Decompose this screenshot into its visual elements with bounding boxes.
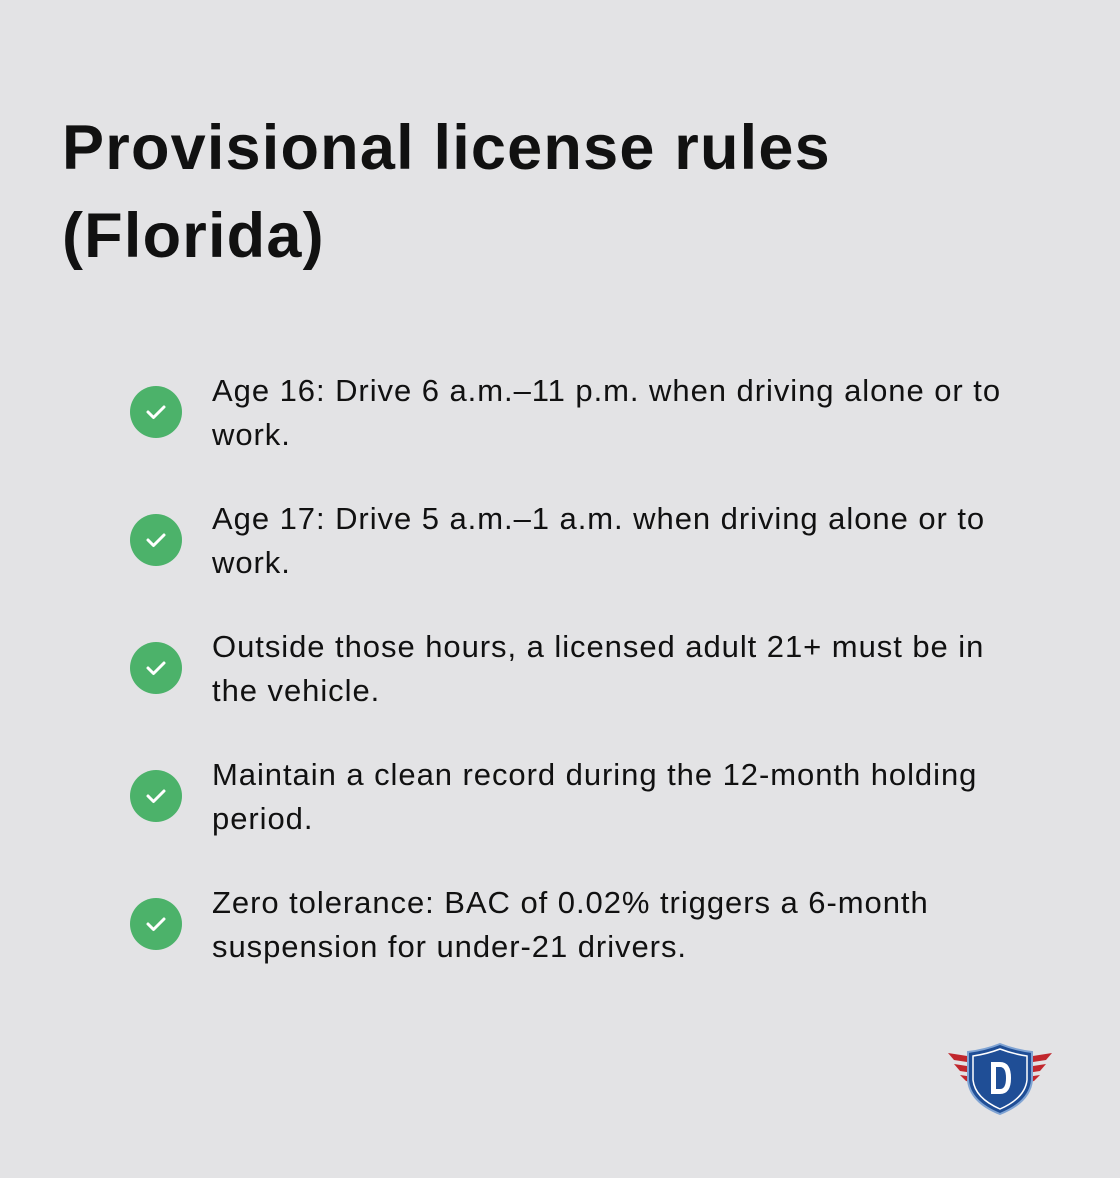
icon: check: [130, 898, 182, 950]
text 2: Age 17: Drive 5 a.m.–1 a.m. when driving alone or to: [212, 501, 985, 536]
item 1: [130, 373, 1001, 452]
text 2: work.: [212, 545, 291, 580]
title: Provisional license rules: [62, 113, 831, 183]
text 1: Age 16: Drive 6 a.m.–11 p.m. when driving alone or to: [212, 373, 1001, 408]
icon: check: [130, 770, 182, 822]
text 3: the vehicle.: [212, 673, 380, 708]
text 2: [212, 501, 985, 580]
icon: check: [130, 386, 182, 438]
text 1: [212, 373, 1001, 452]
icon: check: [130, 642, 182, 694]
icon: check: [130, 514, 182, 566]
title: (Florida): [62, 201, 325, 271]
text 4: period.: [212, 801, 313, 836]
item 2: [130, 501, 985, 580]
text 1: work.: [212, 417, 291, 452]
item 3: [130, 629, 984, 708]
item 4: [130, 757, 977, 836]
text 3: [212, 629, 984, 708]
text 5: Zero tolerance: BAC of 0.02% triggers a 6-month: [212, 885, 929, 920]
text 3: Outside those hours, a licensed adult 21+ must be in: [212, 629, 984, 664]
item 5: [130, 885, 929, 964]
text 4: [212, 757, 977, 836]
text 4: Maintain a clean record during the 12-month holding: [212, 757, 977, 792]
title: [62, 113, 831, 271]
logo: [948, 1043, 1052, 1115]
text 5: suspension for under-21 drivers.: [212, 929, 687, 964]
text 5: [212, 885, 929, 964]
